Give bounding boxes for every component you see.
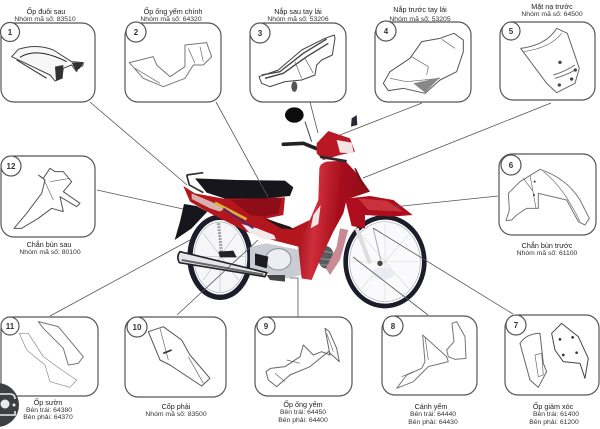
panel 11: [1, 317, 98, 396]
labels: bottom row: Ốp giảm xóc: [533, 401, 574, 411]
panel 1: 1: [8, 28, 13, 37]
panel 5: 5: [509, 27, 514, 36]
panel 12: [1, 156, 95, 237]
rear mudguard: [175, 204, 207, 240]
red body: [183, 161, 413, 280]
labels: bottom row: [23, 397, 579, 426]
panel 6: 6: [509, 161, 514, 170]
panel 1: [0, 22, 95, 102]
labels: bottom row: Bên trái: 64450: [280, 409, 326, 416]
panel 5: [500, 22, 595, 100]
labels: top row: Nhóm mã số: 53205: [389, 14, 451, 23]
panel 9: 9: [264, 322, 269, 331]
labels: bottom row: Cánh yếm: [415, 402, 447, 411]
motorcycle: [175, 107, 424, 306]
panel 10: 10: [133, 323, 142, 332]
labels: bottom row: Nhóm mã số: 83500: [145, 409, 207, 418]
labels: bottom row: Bên phải: 64430: [408, 419, 458, 426]
labels: side panels: Nhóm mã số: 80100: [19, 247, 81, 256]
labels: top row: Nhóm mã số: 83510: [14, 14, 76, 23]
panel 3: 3: [258, 29, 263, 38]
panel 8: [382, 316, 477, 395]
engine: [218, 243, 334, 278]
panel 7: 7: [514, 321, 519, 330]
labels: top row: Ốp ống yếm chính: [144, 6, 202, 16]
panel 4: 4: [384, 27, 389, 36]
panel 6: [499, 154, 596, 235]
labels: bottom row: Bên trái: 64380: [26, 407, 72, 414]
leader lines: [50, 102, 551, 317]
labels: top row: [14, 2, 583, 23]
labels: top row: Nhóm mã số: 64500: [521, 9, 583, 18]
labels: side panels: Nhóm mã số: 61100: [517, 248, 578, 257]
labels: top row: Nhóm mã số: 53206: [267, 14, 329, 23]
panel 2: 2: [134, 28, 139, 37]
labels: bottom row: Cốp phải: [162, 402, 191, 411]
panel 9: [255, 317, 352, 396]
panel 7: [505, 315, 599, 395]
labels: side panels: Chắn bùn sau: [27, 240, 71, 249]
panel 2: [125, 22, 221, 102]
labels: top row: Ốp đuôi sau: [27, 6, 65, 16]
labels: bottom row: Bên trái: 61400: [533, 411, 579, 418]
muffler: [178, 252, 267, 277]
icon: lens badge: [0, 383, 19, 427]
panel 3: [250, 23, 346, 102]
labels: bottom row: Bên phải: 64400: [278, 417, 328, 424]
labels: bottom row: Ốp ống yếm: [283, 399, 323, 409]
panel 12: 12: [7, 162, 16, 171]
panel 8: 8: [391, 322, 396, 331]
labels: top row: Mặt nạ trước: [531, 2, 573, 11]
panel 4: [375, 21, 471, 102]
panel 10: [125, 317, 226, 397]
front wheel: [346, 217, 424, 306]
panel 11: 11: [6, 322, 15, 331]
labels: top row: Nắp sau tay lái: [274, 7, 322, 16]
labels: side panels: Chắn bùn trước: [522, 241, 573, 250]
labels: top row: Nắp trước tay lái: [393, 5, 447, 14]
labels: bottom row: Bên phải: 64370: [23, 414, 73, 421]
seat: [195, 178, 293, 199]
labels: bottom row: Ốp sườn: [34, 397, 62, 407]
labels: bottom row: Bên trái: 64440: [410, 411, 456, 418]
labels: bottom row: Bên phải: 61200: [529, 419, 579, 426]
handlebar and headlight: [283, 107, 357, 161]
rear wheel: [190, 217, 250, 297]
labels: side panels: [19, 240, 578, 257]
labels: top row: Nhóm mã số: 64320: [140, 14, 202, 23]
